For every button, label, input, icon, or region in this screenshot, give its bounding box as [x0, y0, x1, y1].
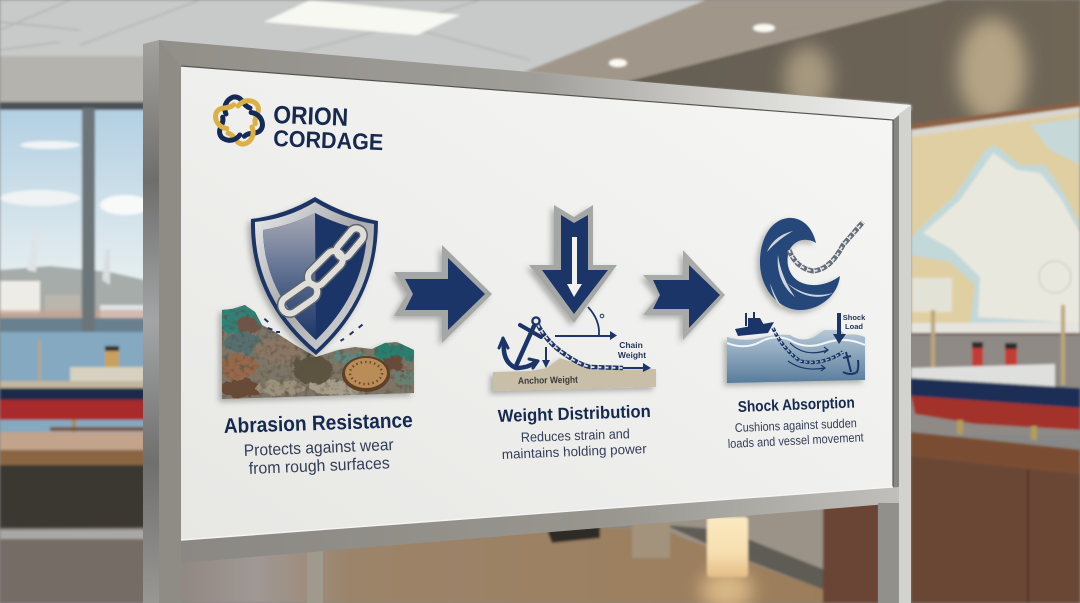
brain coral: [342, 356, 390, 392]
right cabinet under board: [823, 500, 879, 603]
small anchor: [843, 352, 858, 374]
angle arc: [588, 307, 599, 335]
shock load arrow: [833, 313, 846, 344]
frame right post: [878, 503, 899, 603]
description: weight distribution: Reduces strain and: [521, 426, 630, 445]
ship model left: [0, 332, 145, 434]
arrow 2: [643, 250, 725, 340]
wall map: [911, 102, 1080, 336]
heading: weight distribution: Weight Distribution: [497, 401, 651, 426]
current arrows: [788, 343, 828, 371]
sea chain: [773, 328, 843, 362]
anchor weight label: Anchor Weight: [518, 375, 579, 387]
back wall below board: [665, 495, 825, 590]
shield icon: [251, 197, 378, 355]
horizontal force arrow: [555, 331, 617, 340]
abrasion debris: [264, 318, 363, 342]
ceiling light: [264, 0, 460, 35]
anchor weight arrow: [542, 347, 550, 368]
frame left front face: [159, 40, 181, 603]
chain weight label: Weight: [618, 350, 646, 360]
floor lamp: [701, 517, 753, 603]
heading: abrasion resistance: Abrasion Resistance: [223, 409, 413, 438]
vase: [632, 520, 670, 558]
frame right outer strip: [899, 105, 911, 603]
chain weight label: [618, 340, 646, 360]
right dark wall: [625, 0, 1080, 126]
chain illustration: [538, 325, 623, 368]
frame bottom bar: [181, 487, 899, 563]
description: abrasion resistance: Protects against wear: [243, 436, 395, 460]
description: abrasion resistance: [243, 436, 395, 478]
frame middle support: [307, 550, 323, 603]
logo: [212, 97, 384, 155]
shock load label: Load: [845, 322, 863, 331]
frame top bar: [159, 40, 911, 120]
panel: abrasion resistance: [214, 197, 417, 478]
chain weight label: Chain: [619, 340, 643, 350]
shock load label: [843, 313, 866, 331]
left table: [0, 427, 145, 530]
sea panel: [725, 330, 867, 385]
lower right wall: [911, 335, 1080, 435]
heading: shock absorption: Shock Absorption: [738, 395, 855, 416]
shock load label: Shock: [843, 313, 866, 322]
downlights: [609, 24, 775, 67]
panel: shock absorption: [725, 218, 867, 451]
boat: [735, 312, 774, 336]
frame right recess: [893, 116, 899, 490]
anchor icon: [499, 317, 541, 368]
left wall: [0, 56, 145, 102]
logo wordmark: ORION: [273, 101, 349, 132]
degree mark: [600, 314, 604, 318]
description: abrasion resistance: from rough surfaces: [248, 454, 390, 478]
description: weight distribution: [502, 426, 647, 462]
description: shock absorption: loads and vessel movement: [727, 430, 864, 451]
reef image: [214, 300, 417, 402]
description: shock absorption: Cushions against sudden: [735, 416, 857, 435]
ceiling: [0, 0, 1080, 110]
description: weight distribution: maintains holding power: [502, 441, 647, 462]
panel: weight distribution: [493, 205, 656, 462]
wave icon: [760, 218, 840, 310]
description: shock absorption: [727, 416, 864, 451]
ceiling tile lines: [0, 0, 530, 60]
board frame: [143, 40, 911, 603]
frame left side face: [143, 40, 159, 603]
board surface: [181, 66, 893, 540]
floor: [0, 528, 830, 603]
wall light pools: [784, 18, 1026, 122]
ground strip: [493, 358, 656, 391]
ship model right: [911, 305, 1080, 440]
right soffit: [524, 0, 960, 82]
chain force arrow: [623, 363, 651, 372]
wave chain: [789, 222, 863, 271]
logo wordmark line 2: CORDAGE: [273, 125, 384, 155]
chain on shield: [278, 225, 366, 317]
down arrow icon: [529, 205, 617, 323]
window: [0, 102, 150, 434]
logo mark: [212, 97, 266, 144]
right table and cabinet: [911, 432, 1080, 474]
arrow 1: [394, 245, 492, 343]
